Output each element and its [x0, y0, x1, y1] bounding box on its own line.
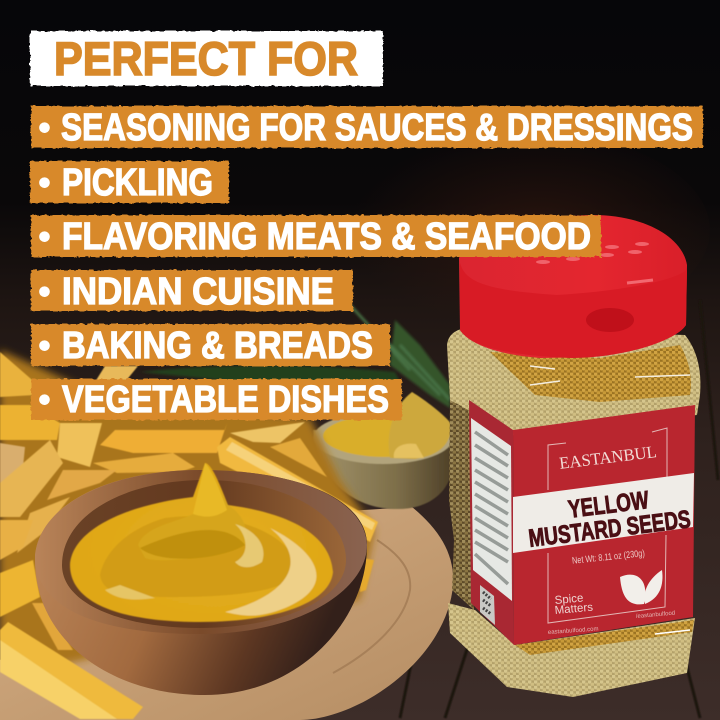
tagline [554, 593, 594, 617]
jar: side seeds [449, 400, 474, 610]
website and social: eastanbulfood.com [548, 626, 599, 636]
net weight: Net Wt: 8.11 oz (230g) [572, 548, 645, 567]
small mustard bowl [313, 392, 453, 509]
title banner: PERFECT FOR [54, 32, 358, 85]
background [0, 153, 720, 720]
green herbs [140, 305, 450, 408]
website and social [548, 611, 675, 636]
white stripe [513, 473, 694, 553]
list item: flavoring meats: • [38, 216, 51, 257]
tagline: Spice [554, 593, 584, 607]
nutrition panel [471, 418, 512, 601]
wooden dipping bowl [35, 470, 367, 695]
website and social: /eastanbulfood [636, 611, 675, 620]
list item: indian cuisine: • [38, 271, 51, 312]
french fries [0, 352, 378, 719]
list item: flavoring meats: FLAVORING MEATS & SEAFOOD [62, 216, 591, 258]
tagline: Matters [554, 602, 594, 617]
mustard swirl [70, 463, 333, 622]
list item: seasoning: • [38, 107, 51, 148]
list item: vegetable dishes: • [38, 379, 51, 420]
list item: indian cuisine: INDIAN CUISINE [62, 271, 334, 313]
jar: red lid [459, 215, 687, 358]
brand frame and logo [548, 428, 667, 623]
icon: leaves [620, 570, 662, 604]
jar: upper seeds [447, 328, 700, 440]
list item: baking: BAKING & BREADS [62, 325, 373, 367]
product name: YELLOW [567, 486, 651, 524]
QR code [480, 585, 495, 625]
jar: lower seeds [448, 603, 695, 697]
product jar [447, 215, 700, 697]
list item: baking: • [38, 325, 51, 366]
jar: red label [469, 400, 695, 645]
brand frame and logo: EASTANBUL [558, 442, 658, 473]
list item: pickling: PICKLING [62, 162, 213, 204]
wooden plate [0, 507, 453, 720]
list item: vegetable dishes: VEGETABLE DISHES [62, 379, 389, 421]
list item: pickling: • [38, 162, 51, 203]
fries shadow base [0, 350, 375, 665]
